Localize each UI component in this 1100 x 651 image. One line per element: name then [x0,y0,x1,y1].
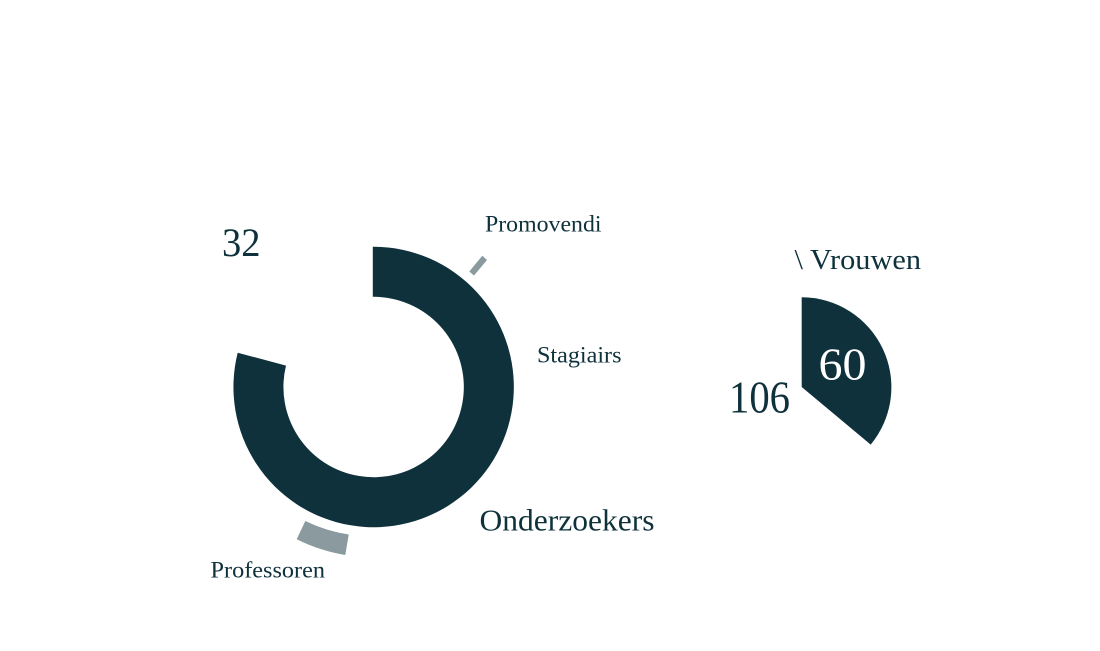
label: Onderzoekers: Onderzoekers [480,502,654,538]
donut segment: promovendi [469,256,487,276]
number: 106: 106 [729,372,790,422]
donut chart: staff composition [233,247,514,555]
pie chart: women share [802,297,891,445]
number: 32: 32 [222,220,260,265]
donut segment: professoren [297,521,349,555]
number: 60: 60 [818,338,866,390]
label: Professoren: Professoren [210,558,326,582]
heading: Vrouwen: \ Vrouwen [794,244,922,276]
label: Stagiairs: Stagiairs [537,342,622,368]
donut segment: onderzoekers and stagiairs [233,247,514,527]
label: Promovendi: Promovendi [485,212,602,236]
